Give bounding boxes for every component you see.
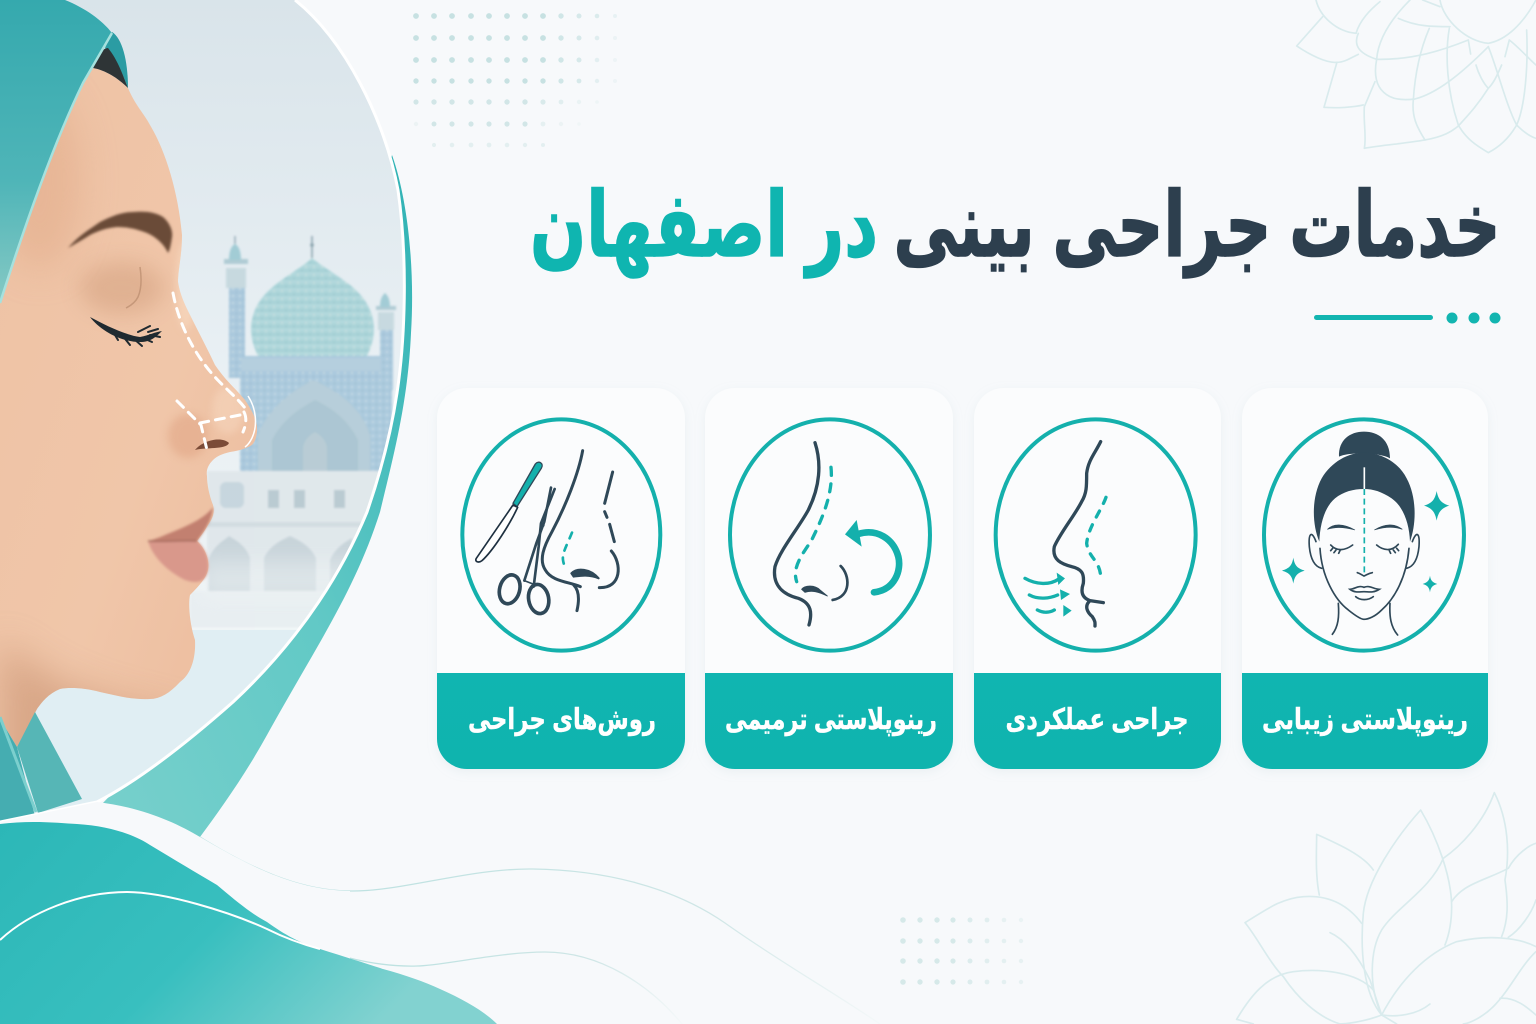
card: reconstructive rhinoplasty <box>705 388 953 769</box>
bottom fog on arcade <box>208 558 343 592</box>
nostril <box>195 439 229 450</box>
face <box>0 68 258 747</box>
label: جراحی عملکردی <box>1006 704 1188 736</box>
nose highlight edge <box>245 396 255 447</box>
card: rhinoplasty cosmetic <box>1242 388 1488 769</box>
label band <box>437 673 685 769</box>
title: teal part: در اصفهان <box>530 176 878 278</box>
label: روش‌های جراحی <box>468 704 656 736</box>
decorative lotus bottom right <box>1237 793 1536 1024</box>
wavy thin lines <box>200 837 880 1024</box>
eyebrow <box>68 212 172 253</box>
icon: nose with return arrow <box>730 419 930 651</box>
label band <box>974 673 1221 769</box>
dome <box>251 236 374 356</box>
title divider <box>1314 312 1500 324</box>
white band above wave <box>0 802 350 960</box>
label: رینوپلاستی ترمیمی <box>725 704 937 737</box>
facial shading <box>80 262 164 314</box>
decorative lotus top right <box>1297 0 1536 153</box>
card: functional surgery <box>974 388 1221 769</box>
portrait edge outline <box>0 0 404 822</box>
sky backdrop <box>18 0 403 814</box>
left minaret <box>224 236 248 378</box>
decorative dot grid bottom <box>900 917 1023 985</box>
hijab <box>0 0 128 303</box>
label: رینوپلاستی زیبایی <box>1262 704 1468 737</box>
decorative dot grid top <box>413 13 617 147</box>
title <box>530 176 1500 278</box>
card: surgical methods <box>437 388 685 769</box>
icon: airflow nose <box>996 419 1196 651</box>
right minaret <box>376 293 396 390</box>
surgical dashed markings <box>173 293 246 450</box>
collar <box>0 712 82 824</box>
water <box>184 630 296 680</box>
plaza <box>190 591 410 628</box>
icon: face symmetry <box>1264 419 1464 651</box>
lips <box>148 507 213 582</box>
lower arcade <box>207 471 389 591</box>
portrait photo panel <box>0 0 420 830</box>
teal crescent behind portrait <box>100 155 412 837</box>
label band <box>705 673 953 769</box>
bottom teal wave <box>0 822 497 1024</box>
closed eye <box>90 267 162 346</box>
label band <box>1242 673 1488 769</box>
icon: surgical tools and nose <box>462 419 660 651</box>
mosque illustration <box>207 235 397 592</box>
portal <box>240 356 392 471</box>
